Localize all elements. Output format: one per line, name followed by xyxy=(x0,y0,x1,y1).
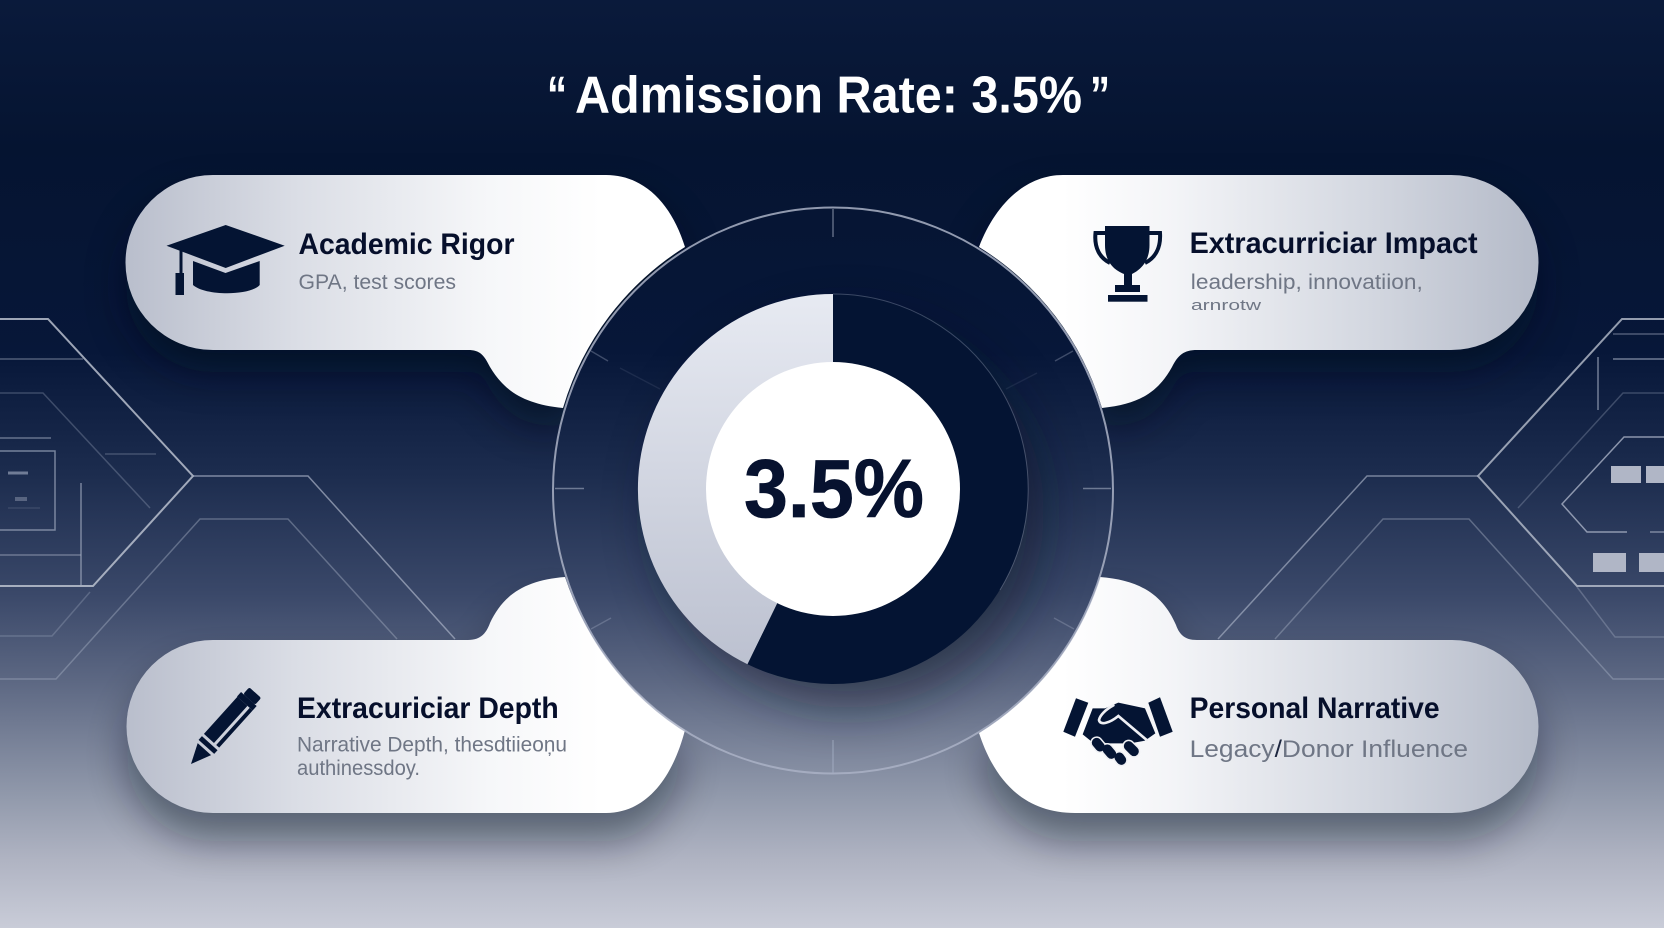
center value: 3.5% xyxy=(744,442,924,535)
description: Narrative Depth, thesdtiieoņu xyxy=(297,734,567,756)
dark segment xyxy=(748,294,1028,684)
center disc xyxy=(706,362,960,616)
thin highlight arc xyxy=(833,294,1028,590)
panel: Extracuriciar Depth xyxy=(126,577,685,813)
chart: central donut xyxy=(553,208,1113,774)
icon: pencil xyxy=(183,685,263,771)
heading: Extracuriciar Depth xyxy=(297,692,559,725)
description: Legacy /Donor Influence xyxy=(1190,736,1468,763)
outer ring xyxy=(553,208,1113,774)
icon: trophy xyxy=(1095,226,1160,302)
panel: Personal Narrative xyxy=(979,577,1538,813)
description second line: arnrotw xyxy=(1191,297,1261,314)
ring tick marks xyxy=(555,209,1111,773)
donut shadow xyxy=(652,316,1044,708)
card shape top left xyxy=(125,175,685,408)
title: ” xyxy=(1090,66,1110,124)
icon: handshake xyxy=(1063,697,1173,760)
left circuit line decoration xyxy=(0,319,455,679)
heading: Extracurriciar Impact xyxy=(1190,227,1478,260)
description second line: authinessdoy. xyxy=(297,757,420,780)
card shadows xyxy=(125,197,1538,841)
description: GPA, test scores xyxy=(298,271,456,294)
heading: Personal Narrative xyxy=(1190,692,1440,725)
light segment xyxy=(638,294,833,664)
icon: graduation cap xyxy=(166,225,285,295)
panel: Extracurriciar Impact xyxy=(979,175,1538,408)
card shape bottom right xyxy=(979,577,1538,813)
description: leadership, innovatiion, xyxy=(1191,271,1423,294)
title: “ xyxy=(547,66,567,124)
panel: Academic Rigor xyxy=(125,175,685,408)
card shape bottom left xyxy=(126,577,685,813)
right circuit line decoration xyxy=(1218,319,1664,679)
heading: Academic Rigor xyxy=(298,228,515,261)
card shape top right xyxy=(979,175,1538,408)
title: Admission Rate: 3.5% xyxy=(575,66,1082,124)
